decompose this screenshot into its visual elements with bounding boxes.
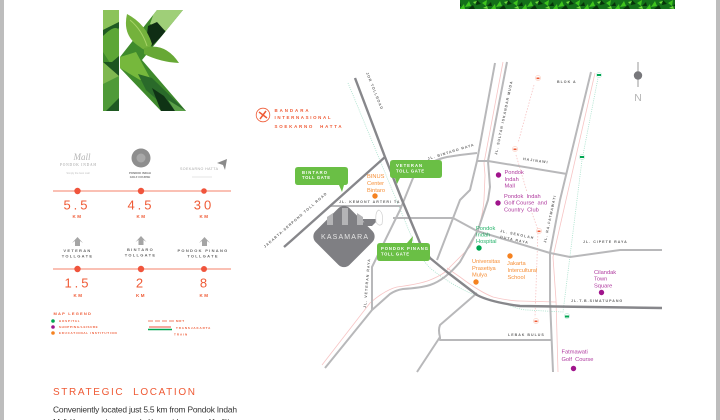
km units xyxy=(72,214,210,219)
callout: pondok pinang toll gate: TOLL GATE xyxy=(381,252,409,256)
legend title: MAP LEGEND xyxy=(54,311,92,316)
station markers xyxy=(512,72,602,324)
km units xyxy=(74,293,210,298)
legend points: EDUCATIONAL INSTITUTION xyxy=(59,331,117,335)
road labels: JAKARTA-SERPONG TOLL ROAD xyxy=(263,191,328,249)
compass xyxy=(634,62,642,104)
road labels: HAJINAWI xyxy=(523,157,549,165)
road labels: JL. BINTARO RAYA xyxy=(427,143,475,161)
km units: KM xyxy=(136,293,146,298)
legend lines xyxy=(148,319,211,336)
road labels: JL. VETERAN RAYA xyxy=(363,258,371,308)
marker dots xyxy=(74,266,207,272)
callout: pondok pinang toll gate: PONDOK PINANG xyxy=(381,246,428,251)
logo: Mall Pondok Indah: Mall xyxy=(72,152,91,162)
body copy xyxy=(53,404,237,420)
points of interest: education: BINUS xyxy=(367,174,385,180)
distance row 1 xyxy=(53,188,231,219)
callout: veteran toll gate xyxy=(390,160,442,184)
points of interest: shopping and leisure: Golf Course and xyxy=(504,200,547,206)
distance values: 2 xyxy=(136,276,146,290)
points of interest: shopping and leisure: Square xyxy=(594,284,612,290)
thin rail and transit lines xyxy=(322,62,598,372)
km units: KM xyxy=(200,293,210,298)
distance values xyxy=(63,198,214,212)
airport label: SOEKARNO HATTA xyxy=(274,124,342,129)
tollgate names xyxy=(62,247,229,258)
legend lines: MRT xyxy=(176,319,185,323)
points of interest: shopping and leisure: Golf Course xyxy=(562,357,593,363)
body copy: Conveniently located just 5.5 km from Pondok Indah xyxy=(53,404,237,414)
points of interest: shopping and leisure: Cilandak xyxy=(594,270,616,276)
callout: veteran toll gate: TOLL GATE xyxy=(396,168,424,174)
airport label xyxy=(256,108,342,129)
legend lines: TRANSJAKARTA xyxy=(176,326,211,330)
points of interest: shopping and leisure: Pondok xyxy=(504,170,524,176)
distance row 2 xyxy=(53,236,231,298)
top foliage banner xyxy=(460,0,675,9)
points of interest: hospital: Indah xyxy=(476,232,490,238)
road labels: BLOK A xyxy=(557,80,577,84)
points of interest: education: Bintaro xyxy=(367,188,385,194)
logo: Pondok Indah Golf Course: PONDOK INDAH xyxy=(129,171,151,175)
points of interest: shopping and leisure: Country Club xyxy=(504,208,539,214)
points of interest: hospital xyxy=(476,226,497,251)
road labels: JL. CIPETE RAYA xyxy=(583,240,628,244)
points of interest: shopping and leisure: Town xyxy=(594,276,607,282)
distance values xyxy=(64,276,210,290)
points of interest: shopping and leisure: Fatmawati xyxy=(562,350,588,356)
points of interest: hospital: Pondok xyxy=(476,226,495,232)
tollgate names: TOLLGATE xyxy=(125,252,156,258)
road labels: JL. SULTAN ISKANDAR MUDA xyxy=(494,80,514,155)
points of interest: hospital: Hospital xyxy=(476,239,497,245)
airport label: BANDARA xyxy=(274,108,309,113)
legend points: SHOPPING/LEISURE xyxy=(59,325,98,329)
tollgate names: TOLLGATE xyxy=(62,254,93,258)
distance values: 1.5 xyxy=(64,276,92,290)
logo: Soekarno Hatta airport: SOEKARNO HATTA xyxy=(180,167,219,171)
callout: bintaro toll gate xyxy=(295,167,348,192)
logo: Pondok Indah Golf Course xyxy=(129,148,151,179)
tollgate names: VETERAN xyxy=(63,248,92,253)
right page edge xyxy=(716,0,720,420)
logos row xyxy=(60,148,227,179)
logo: Mall Pondok Indah xyxy=(60,152,96,175)
map legend xyxy=(51,311,211,336)
heading: strategic location: STRATEGIC LOCATION xyxy=(53,387,195,398)
points of interest: shopping and leisure xyxy=(495,170,616,371)
legend points xyxy=(51,319,117,335)
timeline xyxy=(53,268,231,270)
points of interest: education: Intercultural xyxy=(508,268,537,274)
logo: Soekarno Hatta airport xyxy=(180,159,227,177)
tollgate names: PONDOK PINANG xyxy=(177,248,229,253)
compass: N xyxy=(634,92,642,104)
marker dots xyxy=(74,188,207,194)
km units: KM xyxy=(74,293,84,298)
kasamara site xyxy=(310,203,383,270)
logo: leaf-filled letter K xyxy=(103,10,187,111)
road labels: JL.T.B.SIMATUPANG xyxy=(571,299,623,303)
points of interest: education: School xyxy=(508,275,525,281)
legend points: HOSPITAL xyxy=(59,319,80,323)
points of interest: shopping and leisure: Mall xyxy=(504,184,515,190)
distance values: 30 xyxy=(194,198,214,212)
timeline xyxy=(53,190,231,192)
callout: veteran toll gate: VETERAN xyxy=(396,163,422,168)
points of interest: education: Prasetiya xyxy=(472,266,497,272)
tollgate names: BINTARO xyxy=(127,247,154,252)
km units: KM xyxy=(136,214,146,219)
points of interest: education: Center xyxy=(367,181,384,187)
road labels: JL. SEKOLAH xyxy=(500,229,535,240)
points of interest: shopping and leisure: Pondok Indah xyxy=(504,194,541,200)
logo: Mall Pondok Indah: PONDOK INDAH xyxy=(60,163,96,167)
logo: Mall Pondok Indah: Simply the best mall xyxy=(66,171,90,175)
road labels xyxy=(263,72,628,337)
kasamara site: KASAMARA xyxy=(321,234,368,241)
legend lines: TRAIN xyxy=(174,332,188,336)
callout: bintaro toll gate: TOLL GATE xyxy=(302,175,330,180)
map xyxy=(256,62,662,372)
distance values: 4.5 xyxy=(127,198,155,212)
road labels: JOR TOLLROAD xyxy=(365,72,384,111)
callout: bintaro toll gate: BINTARO xyxy=(302,170,328,175)
distance values: 5.5 xyxy=(63,198,91,212)
light roads xyxy=(325,62,662,372)
airport label: INTERNASIONAL xyxy=(274,115,331,120)
points of interest: education: Mulya xyxy=(472,272,488,278)
road labels: JL. KEMONT ARTERI TA xyxy=(339,200,401,204)
road labels: JL. RA.FATMAWATI xyxy=(543,194,557,243)
tollgate names: TOLLGATE xyxy=(187,254,219,258)
road labels: LEBAK BULUS xyxy=(508,333,545,337)
points of interest: education: Jakarta xyxy=(507,261,526,267)
toll roads xyxy=(284,78,662,308)
road labels: DUTA RAYA xyxy=(500,235,529,245)
km units: KM xyxy=(200,214,210,219)
points of interest: education: Universitas xyxy=(472,259,500,265)
distance values: 8 xyxy=(200,276,210,290)
km units: KM xyxy=(72,214,82,219)
tollgate icons xyxy=(72,236,210,246)
left page edge xyxy=(0,0,4,420)
callout: pondok pinang toll gate xyxy=(377,236,430,261)
logo: Pondok Indah Golf Course: GOLF COURSE xyxy=(130,175,150,179)
points of interest: shopping and leisure: Indah xyxy=(504,177,519,183)
points of interest: education xyxy=(367,174,537,285)
